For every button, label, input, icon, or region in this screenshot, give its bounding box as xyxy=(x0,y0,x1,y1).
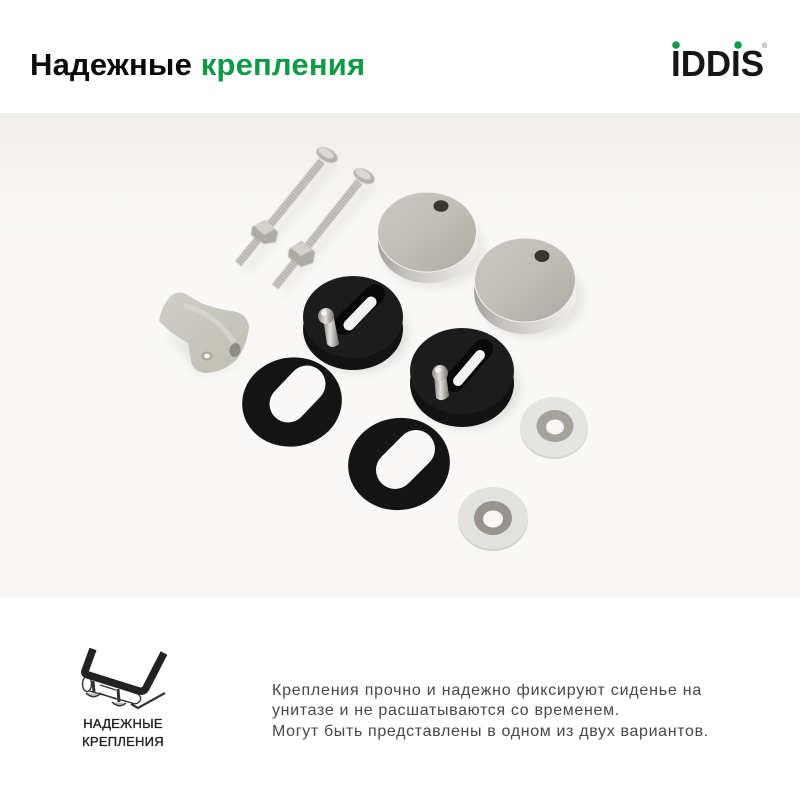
logo dot 1 xyxy=(672,41,680,49)
bolt 1 xyxy=(238,144,340,271)
rubber gasket 2 xyxy=(341,410,457,518)
logo registered mark: ® xyxy=(762,42,768,50)
icon caption xyxy=(82,716,164,748)
black base 1 with pin xyxy=(303,276,408,372)
description text: унитазе и не расшатываются со временем. xyxy=(272,702,620,719)
logo dot 2 xyxy=(734,41,742,49)
white washer 1 xyxy=(520,397,588,459)
plastic key xyxy=(159,292,249,373)
icon caption: НАДЕЖНЫЕ xyxy=(83,716,163,730)
title: Надежные крепления xyxy=(30,47,365,82)
white washer 2 xyxy=(458,487,528,551)
bolt 2 xyxy=(275,165,377,292)
metal cap 2 xyxy=(474,238,584,338)
description text xyxy=(272,682,709,740)
rubber gasket 1 xyxy=(235,349,349,455)
logo wordmark: IDDIS xyxy=(671,43,764,84)
metal cap 1 xyxy=(377,192,484,288)
black base 2 with pin xyxy=(410,328,520,428)
logo: IDDIS xyxy=(671,41,768,84)
photo background xyxy=(0,113,800,597)
description text: Крепления прочно и надежно фиксируют сиденье на xyxy=(272,682,702,698)
icon caption: КРЕПЛЕНИЯ xyxy=(82,734,164,748)
description text: Могут быть представлены в одном из двух вариантов. xyxy=(272,722,709,740)
